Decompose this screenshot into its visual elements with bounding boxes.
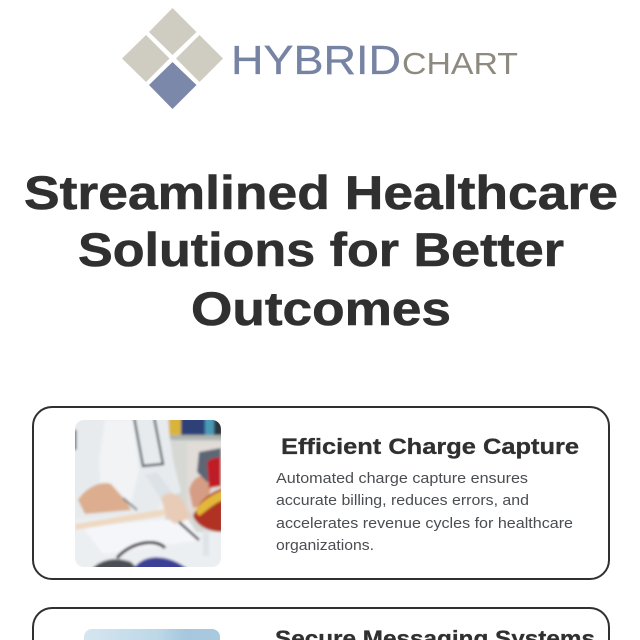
text block: efficient charge capture description: accurate billing, reduces errors, and [276, 492, 529, 509]
text block: efficient charge capture description: organizations. [276, 537, 374, 554]
icon: diamond logo mark [122, 8, 223, 109]
photo: second card image [84, 629, 220, 640]
title: Outcomes [191, 282, 451, 335]
logo wordmark [231, 37, 518, 83]
coat [164, 420, 181, 494]
heart model [189, 476, 213, 508]
panel: secure messaging systems [32, 607, 610, 640]
panel: efficient charge capture [32, 406, 610, 580]
document [88, 518, 196, 552]
photo: doctor with heart model [75, 420, 221, 567]
blood pressure cuff [117, 543, 165, 558]
stethoscope [134, 417, 163, 466]
title: Solutions for Better [78, 223, 564, 276]
heading: efficient charge capture: Efficient Charge Capture [281, 434, 579, 459]
text block: efficient charge capture description: Automated charge capture ensures [276, 470, 528, 487]
right hand [161, 493, 191, 524]
logo wordmark: CHART [402, 47, 518, 81]
title: Streamlined Healthcare [24, 166, 618, 219]
logo wordmark: HYBRID [231, 37, 401, 83]
text block: efficient charge capture description: accelerates revenue cycles for healthcare [276, 515, 573, 532]
paper strip [75, 508, 175, 530]
left hand [78, 483, 131, 514]
title [24, 166, 618, 335]
logo [122, 8, 518, 109]
backdrop and shelf [75, 504, 221, 567]
text block: efficient charge capture description [276, 470, 573, 554]
